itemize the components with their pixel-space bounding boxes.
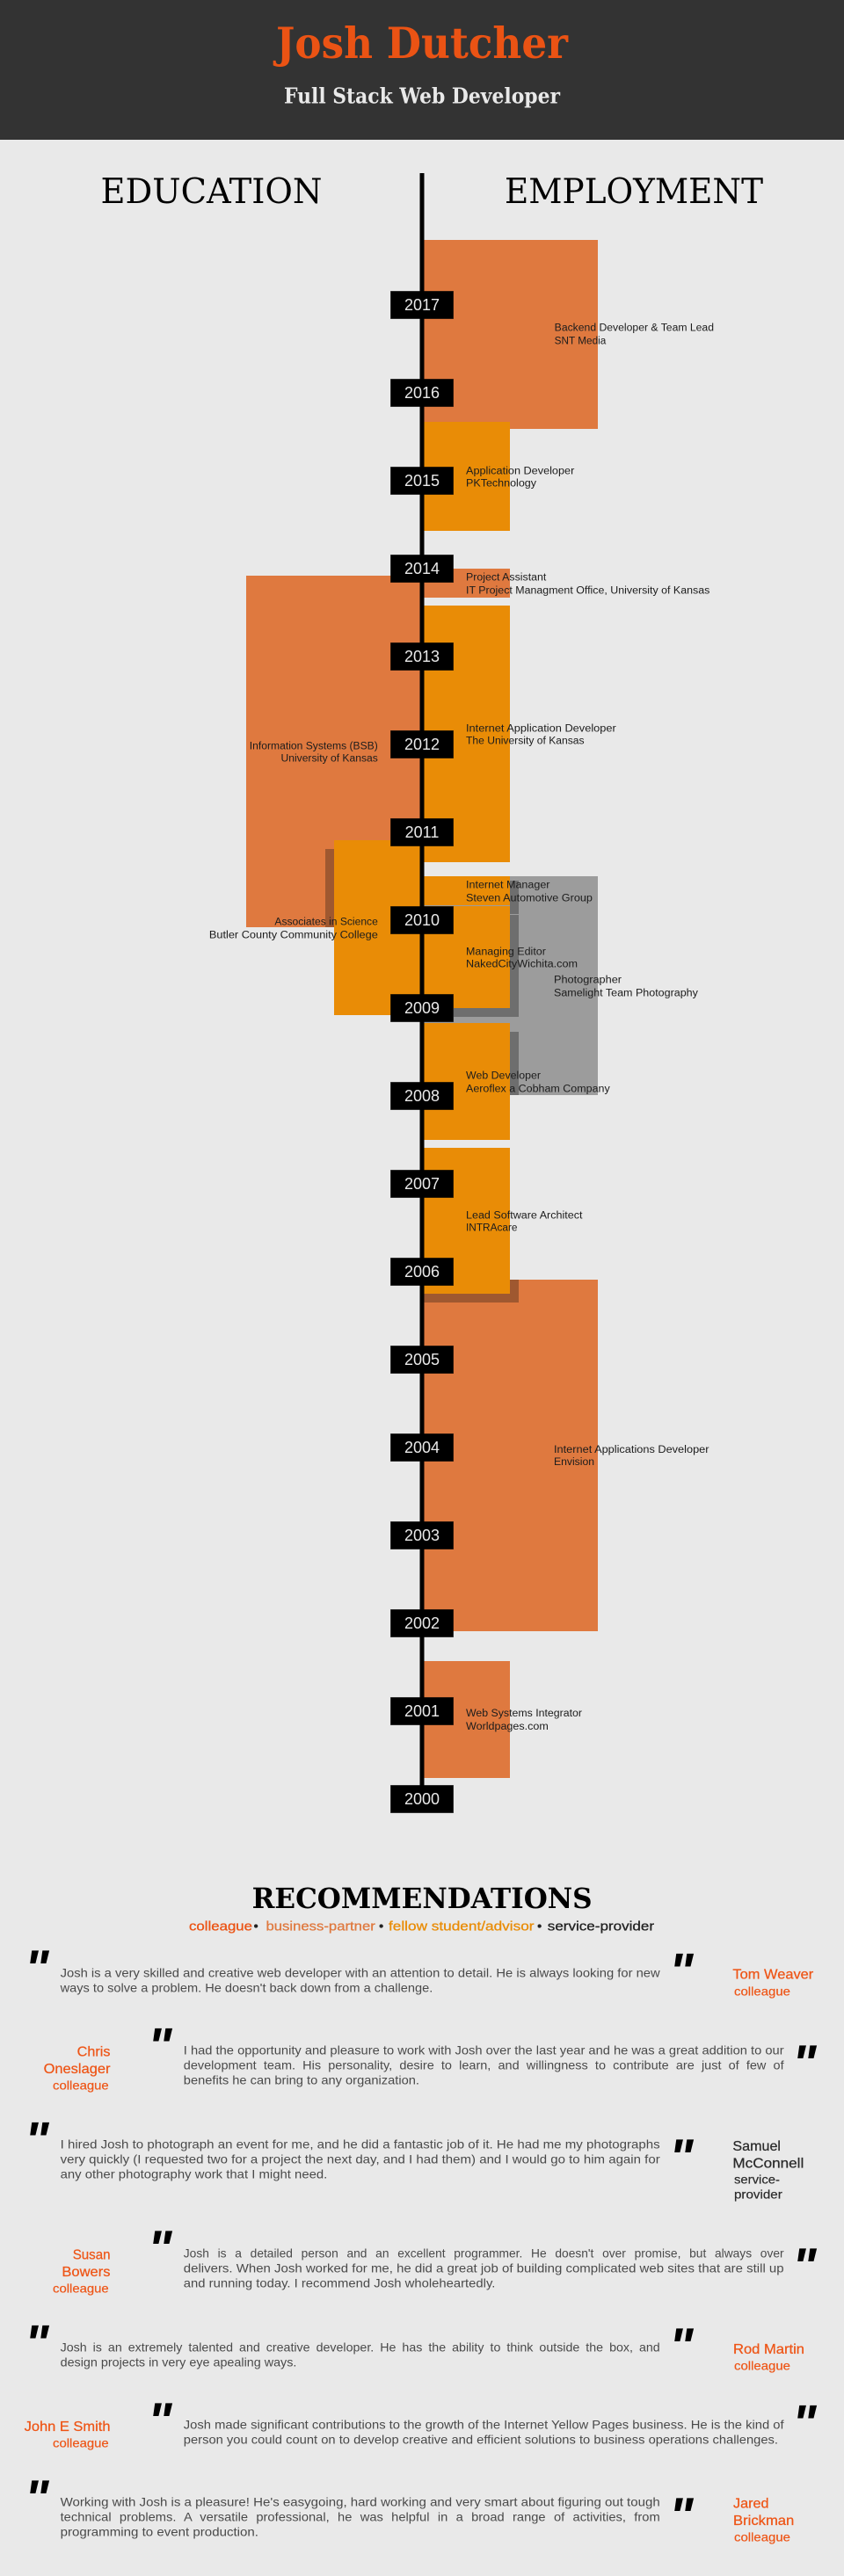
recommendation: Susan Bowers: Bowers <box>62 2265 111 2280</box>
year 2011: 2011 <box>405 824 439 841</box>
recommendation: Chris Oneslager: benefits he can bring to any organization. <box>184 2072 419 2086</box>
year 2008 <box>390 1083 454 1109</box>
year 2017: 2017 <box>404 296 440 314</box>
bar: Internet Application Developer <box>424 606 510 862</box>
bar: Associates in Science education <box>334 840 420 1015</box>
recommendation: Rod Martin <box>25 2315 804 2375</box>
recommendation: Samuel McConnell: very quickly (I requested two for a project the next day, and I had them) and I would go to him again for <box>61 2152 660 2166</box>
year 2009: 2009 <box>404 999 440 1017</box>
job label: SNT Media: Backend Developer & Team Lead <box>555 323 714 334</box>
legend: recommendation types: business-partner <box>266 1919 375 1934</box>
recommendation: Jared Brickman: technical problems. A versatile professional, he was helpful in a broad range of activities, from <box>61 2510 660 2524</box>
year 2010: 2010 <box>404 911 440 929</box>
timeline bars <box>246 240 598 1778</box>
education label: University of Kansas: University of Kansas <box>281 753 378 764</box>
year 2015 <box>390 468 454 494</box>
job label: Steven Automotive Group: Internet Manager <box>466 880 550 890</box>
open quote: " <box>25 1941 50 1997</box>
job label: NakedCityWichita.com: NakedCityWichita.com <box>466 959 578 969</box>
recommendation: Samuel McConnell: Samuel <box>732 2139 781 2154</box>
close quote: " <box>792 2395 818 2452</box>
recommendation: Samuel McConnell: McConnell <box>732 2156 804 2171</box>
recommendation: Chris Oneslager: I had the opportunity and pleasure to work with Josh over the last year and he was a great addition to our <box>184 2043 784 2057</box>
bar shadows over Photographer <box>454 881 519 1095</box>
legend: recommendation types <box>189 1919 654 1934</box>
year 2000 <box>390 1786 454 1812</box>
job label: INTRAcare: INTRAcare <box>466 1223 517 1233</box>
title: Josh Dutcher <box>273 18 569 69</box>
year 2016: 2016 <box>404 384 440 402</box>
legend: recommendation types: • <box>537 1919 542 1934</box>
recommendation: Chris Oneslager: Chris <box>77 2045 111 2060</box>
job label: The University of Kansas: Internet Application Developer <box>466 723 616 734</box>
education label: Butler County Community College <box>209 917 378 940</box>
recommendation: John E Smith: Josh made significant contributions to the growth of the Internet Yellow Pages business. He is the kind of <box>184 2418 784 2432</box>
job label: PKTechnology <box>466 466 574 489</box>
bar: SNT Media <box>424 240 598 429</box>
year 2009 <box>390 995 454 1021</box>
job label: NakedCityWichita.com: Managing Editor <box>466 947 546 957</box>
recommendation: Tom Weaver: ways to solve a problem. He doesn't back down from a challenge. <box>60 1980 433 1994</box>
recommendation: Samuel McConnell: I hired Josh to photograph an event for me, and he did a fantastic job of it. He had me my photographs <box>61 2137 660 2151</box>
year 2005 <box>390 1346 454 1373</box>
close quote: " <box>669 2487 695 2545</box>
recommendation: Tom Weaver <box>25 1941 814 2000</box>
job label: IT Project Management Office: IT Project Managment Office, University of Kansas <box>466 585 710 596</box>
year 2007 <box>390 1171 454 1197</box>
year 2006: 2006 <box>404 1263 440 1281</box>
recommendation: Jared Brickman: Working with Josh is a pleasure! He's easygoing, hard working and very smart about figuring out tough <box>61 2495 660 2509</box>
bar: Managing Editor <box>424 906 510 1008</box>
job label: SNT Media: SNT Media <box>555 337 607 347</box>
bar shadow: Associates over Information Systems <box>325 849 334 927</box>
header banner <box>0 0 844 140</box>
recommendation: Chris Oneslager: development team. His personality, desire to learn, and willingness to contribute are just of few of <box>184 2057 784 2072</box>
open quote: " <box>25 2112 50 2169</box>
recommendation: Jared Brickman: Jared <box>733 2497 768 2512</box>
job label: NakedCityWichita.com <box>466 947 578 969</box>
year 2007: 2007 <box>404 1175 440 1193</box>
bar: INTRAcare <box>424 1148 510 1294</box>
year 2013: 2013 <box>404 648 440 665</box>
legend: recommendation types: • <box>253 1919 258 1934</box>
year 2014 <box>390 555 454 582</box>
job label: Samelight Team Photography <box>554 975 698 998</box>
legend: recommendation types: • <box>379 1919 383 1934</box>
bar: Photographer <box>424 876 598 1095</box>
year 2001: 2001 <box>404 1702 440 1720</box>
education label: Butler County Community College: Associates in Science <box>274 917 378 927</box>
job label: INTRAcare <box>466 1210 583 1233</box>
recommendation: Tom Weaver: Josh is a very skilled and creative web developer with an attention to detail. He is always looking for new <box>61 1965 661 1979</box>
year markers <box>390 292 454 1812</box>
recommendation: Samuel McConnell: any other photography work that I might need. <box>61 2166 327 2181</box>
open quote: " <box>25 2315 50 2372</box>
year 2015: 2015 <box>404 472 440 490</box>
year 2001 <box>390 1698 454 1724</box>
subtitle: Full Stack Web Developer <box>284 83 560 108</box>
recommendation: Chris Oneslager: Oneslager <box>44 2062 111 2077</box>
bar: Web Developer <box>424 1023 510 1140</box>
year 2002: 2002 <box>404 1615 440 1632</box>
year 2013 <box>390 643 454 670</box>
recommendation: Jared Brickman: colleague <box>734 2530 790 2544</box>
recommendation: Tom Weaver: colleague <box>734 1985 790 1999</box>
year 2004 <box>390 1434 454 1461</box>
year 2014: 2014 <box>404 560 440 577</box>
job label: SNT Media <box>555 323 714 347</box>
bar shadow: INTRAcare over Envision <box>424 1280 519 1303</box>
close quote: " <box>792 2238 818 2296</box>
close quote: " <box>669 2129 695 2187</box>
recommendation: Samuel McConnell: service- <box>734 2173 780 2187</box>
recommendation: Susan Bowers: and running today. I recommend Josh wholeheartedly. <box>184 2276 495 2290</box>
open quote: " <box>25 2470 50 2528</box>
recommendation: Samuel McConnell <box>25 2112 804 2202</box>
heading: recommendations: RECOMMENDATIONS <box>252 1882 593 1915</box>
job label: PKTechnology: Application Developer <box>466 466 574 476</box>
year 2006 <box>390 1259 454 1285</box>
job label: Worldpages: Web Systems Integrator <box>466 1709 582 1719</box>
open quote: " <box>148 2018 173 2075</box>
job label: Samelight Team Photography: Samelight Team Photography <box>554 988 698 998</box>
job label: Steven Automotive Group <box>466 880 593 903</box>
recommendation: Rod Martin: Rod Martin <box>733 2342 804 2357</box>
recommendation: John E Smith <box>25 2392 818 2452</box>
year 2003 <box>390 1522 454 1549</box>
recommendation: Susan Bowers: delivers. When Josh worked for me, he did a great job of building complicated web sites that are still up <box>184 2261 784 2275</box>
year 2002 <box>390 1610 454 1636</box>
year 2008: 2008 <box>404 1087 440 1105</box>
recommendation: John E Smith: John E Smith <box>25 2420 111 2435</box>
recommendation: Susan Bowers <box>53 2220 818 2296</box>
year 2017 <box>390 292 454 318</box>
close quote: " <box>792 2035 818 2092</box>
job label: IT Project Management Office: Project Assistant <box>466 572 547 583</box>
timeline spine <box>420 173 424 1799</box>
legend: recommendation types: colleague <box>189 1919 252 1934</box>
job label: Aeroflex: Aeroflex a Cobham Company <box>466 1084 610 1094</box>
education label: University of Kansas <box>250 741 378 764</box>
year 2004: 2004 <box>404 1439 440 1456</box>
legend: recommendation types: service-provider <box>548 1919 654 1934</box>
legend: recommendation types: fellow student/advisor <box>389 1919 535 1934</box>
heading: education: EDUCATION <box>100 172 322 212</box>
year 2005: 2005 <box>404 1351 440 1368</box>
bar: Envision <box>424 1280 598 1631</box>
recommendation: Rod Martin: colleague <box>734 2359 790 2373</box>
job label: INTRAcare: Lead Software Architect <box>466 1210 583 1221</box>
education label: Butler County Community College: Butler County Community College <box>209 930 378 940</box>
job label: PKTechnology: PKTechnology <box>466 478 536 489</box>
recommendation: Susan Bowers: Josh is a detailed person and an excellent programmer. He doesn't over promise, but always over <box>184 2246 784 2260</box>
job label: Samelight Team Photography: Photographer <box>554 975 622 985</box>
year 2003: 2003 <box>404 1527 440 1544</box>
year 2010 <box>390 907 454 933</box>
close quote: " <box>669 2318 695 2375</box>
job label: Envision: Envision <box>554 1457 594 1468</box>
job label: Worldpages: Worldpages.com <box>466 1722 549 1732</box>
job label: Envision: Internet Applications Developer <box>554 1445 709 1455</box>
recommendation: Jared Brickman: Brickman <box>733 2514 794 2529</box>
recommendation: Susan Bowers: colleague <box>53 2282 109 2296</box>
job label: Aeroflex: Web Developer <box>466 1070 541 1081</box>
recommendation: Rod Martin: Josh is an extremely talented and creative developer. He has the ability to think outside the box, and <box>61 2340 660 2355</box>
year 2012 <box>390 731 454 758</box>
bar: Project Assistant <box>424 569 510 598</box>
recommendation: Susan Bowers: Susan <box>73 2248 111 2263</box>
job label: IT Project Management Office <box>466 572 710 596</box>
recommendation: Tom Weaver: Tom Weaver <box>732 1968 814 1983</box>
recommendation: Chris Oneslager <box>44 2018 818 2093</box>
job label: Aeroflex <box>466 1070 610 1094</box>
year 2000: 2000 <box>404 1790 440 1808</box>
bar: Internet Manager <box>424 876 510 905</box>
open quote: " <box>148 2392 173 2450</box>
job label: The University of Kansas: The University of Kansas <box>466 736 585 746</box>
close quote: " <box>669 1943 695 2000</box>
year 2016 <box>390 380 454 406</box>
open quote: " <box>148 2220 173 2278</box>
education label: University of Kansas: Information Systems (BSB) <box>250 741 378 751</box>
year 2011 <box>390 819 454 845</box>
recommendation: Jared Brickman <box>25 2470 794 2545</box>
recommendation: Jared Brickman: programming to event production. <box>61 2525 258 2539</box>
bar: PKTechnology <box>424 422 510 531</box>
bar: Worldpages <box>424 1661 510 1778</box>
year 2012: 2012 <box>404 736 440 753</box>
recommendation: Samuel McConnell: provider <box>734 2188 782 2202</box>
heading: employment: EMPLOYMENT <box>505 172 763 212</box>
job label: Steven Automotive Group: Steven Automotive Group <box>466 893 593 903</box>
job label: The University of Kansas <box>466 723 616 746</box>
job label: Worldpages <box>466 1709 582 1732</box>
recommendation: John E Smith: person you could count on to develop creative and efficient solutions to business operations challenges. <box>184 2433 778 2447</box>
recommendation: John E Smith: colleague <box>53 2436 109 2450</box>
recommendation: Rod Martin: design projects in very eye apealing ways. <box>61 2355 296 2369</box>
bar: Information Systems education <box>246 576 420 927</box>
job label: Envision <box>554 1445 709 1468</box>
recommendation: Chris Oneslager: colleague <box>53 2079 109 2093</box>
